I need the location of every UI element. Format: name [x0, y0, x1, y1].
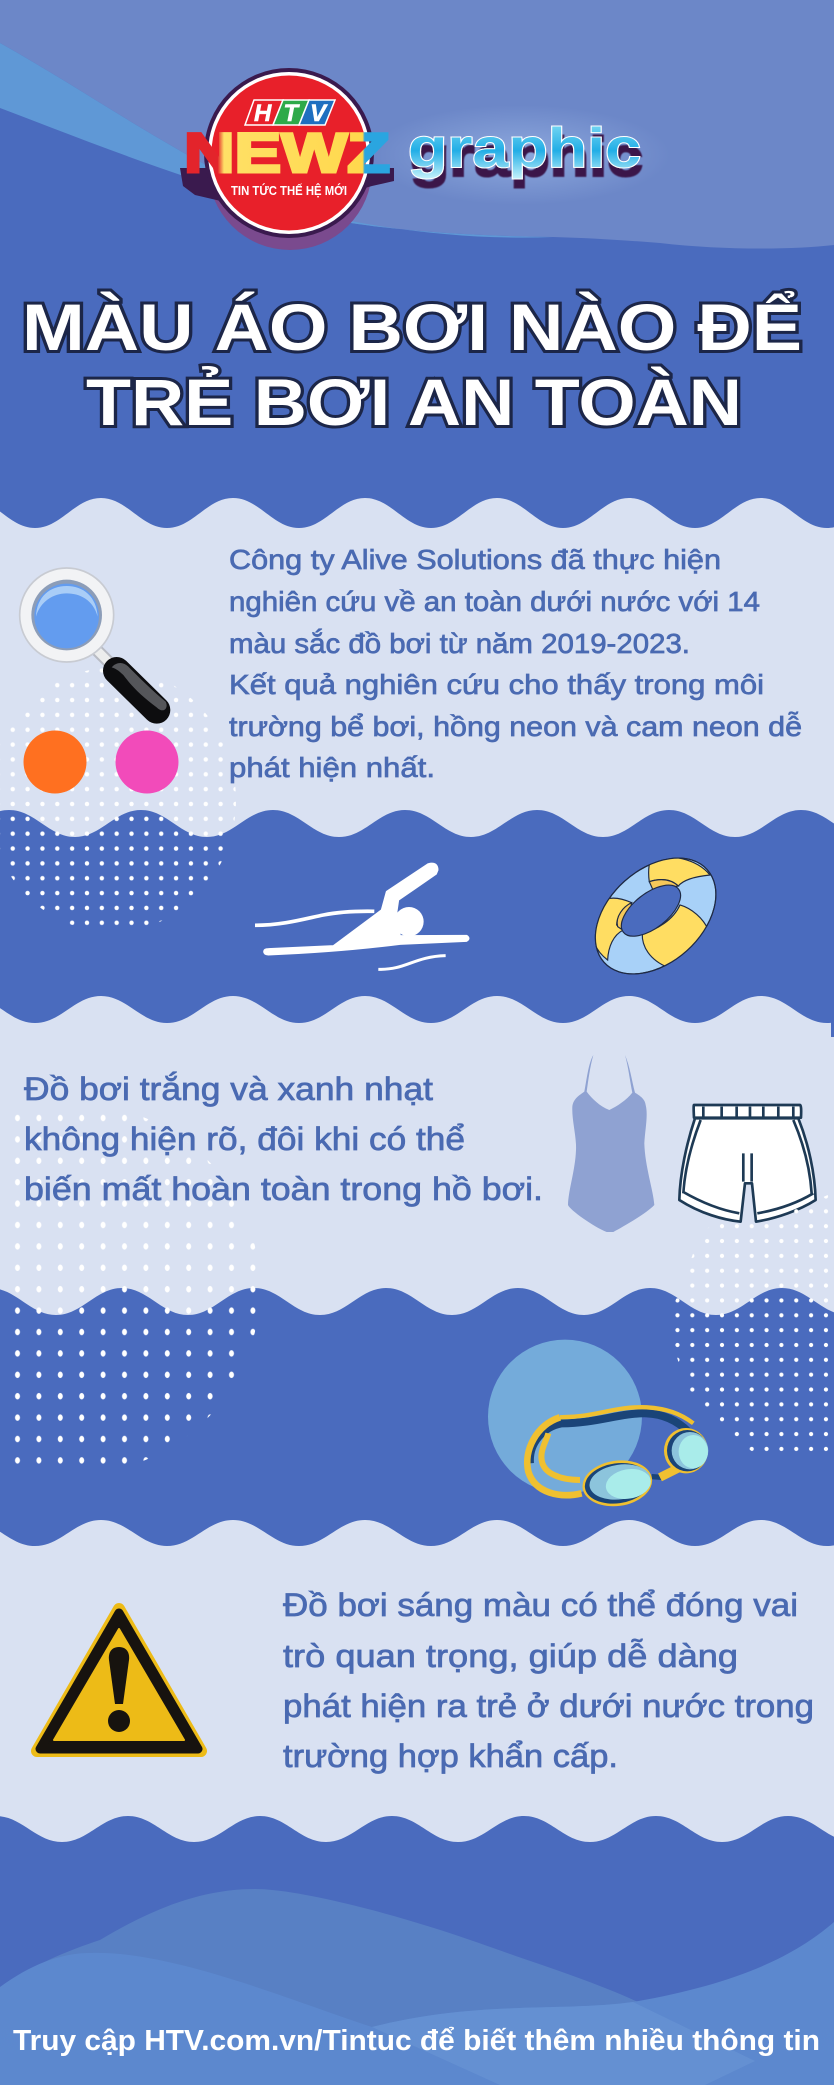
graphic wordmark: graphic	[408, 116, 641, 179]
newz shadows	[180, 168, 394, 202]
red circle badge	[204, 68, 374, 238]
icon: swim goggles	[488, 1340, 708, 1511]
title: MÀU ÁO BƠI NÀO ĐỂ	[22, 290, 802, 364]
text block: bright swimwear: trò quan trọng, giúp dễ dàng	[283, 1638, 738, 1674]
text block: bright swimwear: Đồ bơi sáng màu có thể đóng vai	[283, 1587, 798, 1623]
title	[22, 290, 802, 439]
panel: research light band	[0, 498, 834, 837]
text block: research findings: nghiên cứu về an toàn dưới nước với 14	[229, 586, 760, 617]
slogan: TIN TỨC THẾ HỆ MỚI	[231, 183, 347, 198]
icon: orange colour swatch	[24, 730, 86, 794]
text block: research findings	[229, 544, 802, 783]
icon: warning triangle	[37, 1609, 201, 1751]
panel: clothing light band	[0, 996, 834, 1315]
text block: pale swimwear: Đồ bơi trắng và xanh nhạt	[24, 1071, 433, 1107]
backing circle	[488, 1340, 642, 1494]
logo: HTV NewZ graphic	[180, 68, 670, 250]
text block: research findings: Kết quả nghiên cứu cho thấy trong môi	[229, 669, 764, 700]
icon: swim shorts	[679, 1105, 816, 1222]
icon: pink colour swatch	[116, 730, 178, 794]
icon: swimsuit	[568, 1055, 654, 1232]
title: TRẺ BƠI AN TOÀN	[86, 365, 742, 439]
text block: bright swimwear: phát hiện ra trẻ ở dưới nước trong	[283, 1688, 814, 1724]
header wave shapes	[0, 0, 834, 249]
text block: pale swimwear: biến mất hoàn toàn trong hồ bơi.	[24, 1171, 543, 1207]
footer call to action: Truy cập HTV.com.vn/Tintuc để biết thêm nhiều thông tin	[13, 2025, 820, 2057]
footer wave shapes	[0, 1889, 834, 2085]
text block: research findings: Công ty Alive Solutions đã thực hiện	[229, 544, 721, 575]
text block: bright swimwear	[283, 1587, 814, 1774]
icon: swimmer	[255, 863, 469, 969]
logo badge shadow	[208, 86, 372, 250]
text block: pale swimwear	[24, 1071, 543, 1207]
text block: pale swimwear: không hiện rõ, đôi khi có thể	[24, 1121, 465, 1157]
panel: warning light band	[0, 1520, 834, 1842]
icon: magnifying glass	[20, 568, 167, 710]
icon: swim ring	[594, 858, 716, 974]
text block: research findings: phát hiện nhất.	[229, 752, 435, 783]
NEWZ wordmark: NEWZ	[184, 121, 390, 184]
text block: research findings: trường bể bơi, hồng neon và cam neon dễ	[229, 711, 802, 742]
text block: bright swimwear: trường hợp khẩn cấp.	[283, 1738, 618, 1774]
text block: research findings: màu sắc đồ bơi từ năm 2019-2023.	[229, 628, 690, 659]
HTV mark: HTV	[254, 100, 328, 127]
